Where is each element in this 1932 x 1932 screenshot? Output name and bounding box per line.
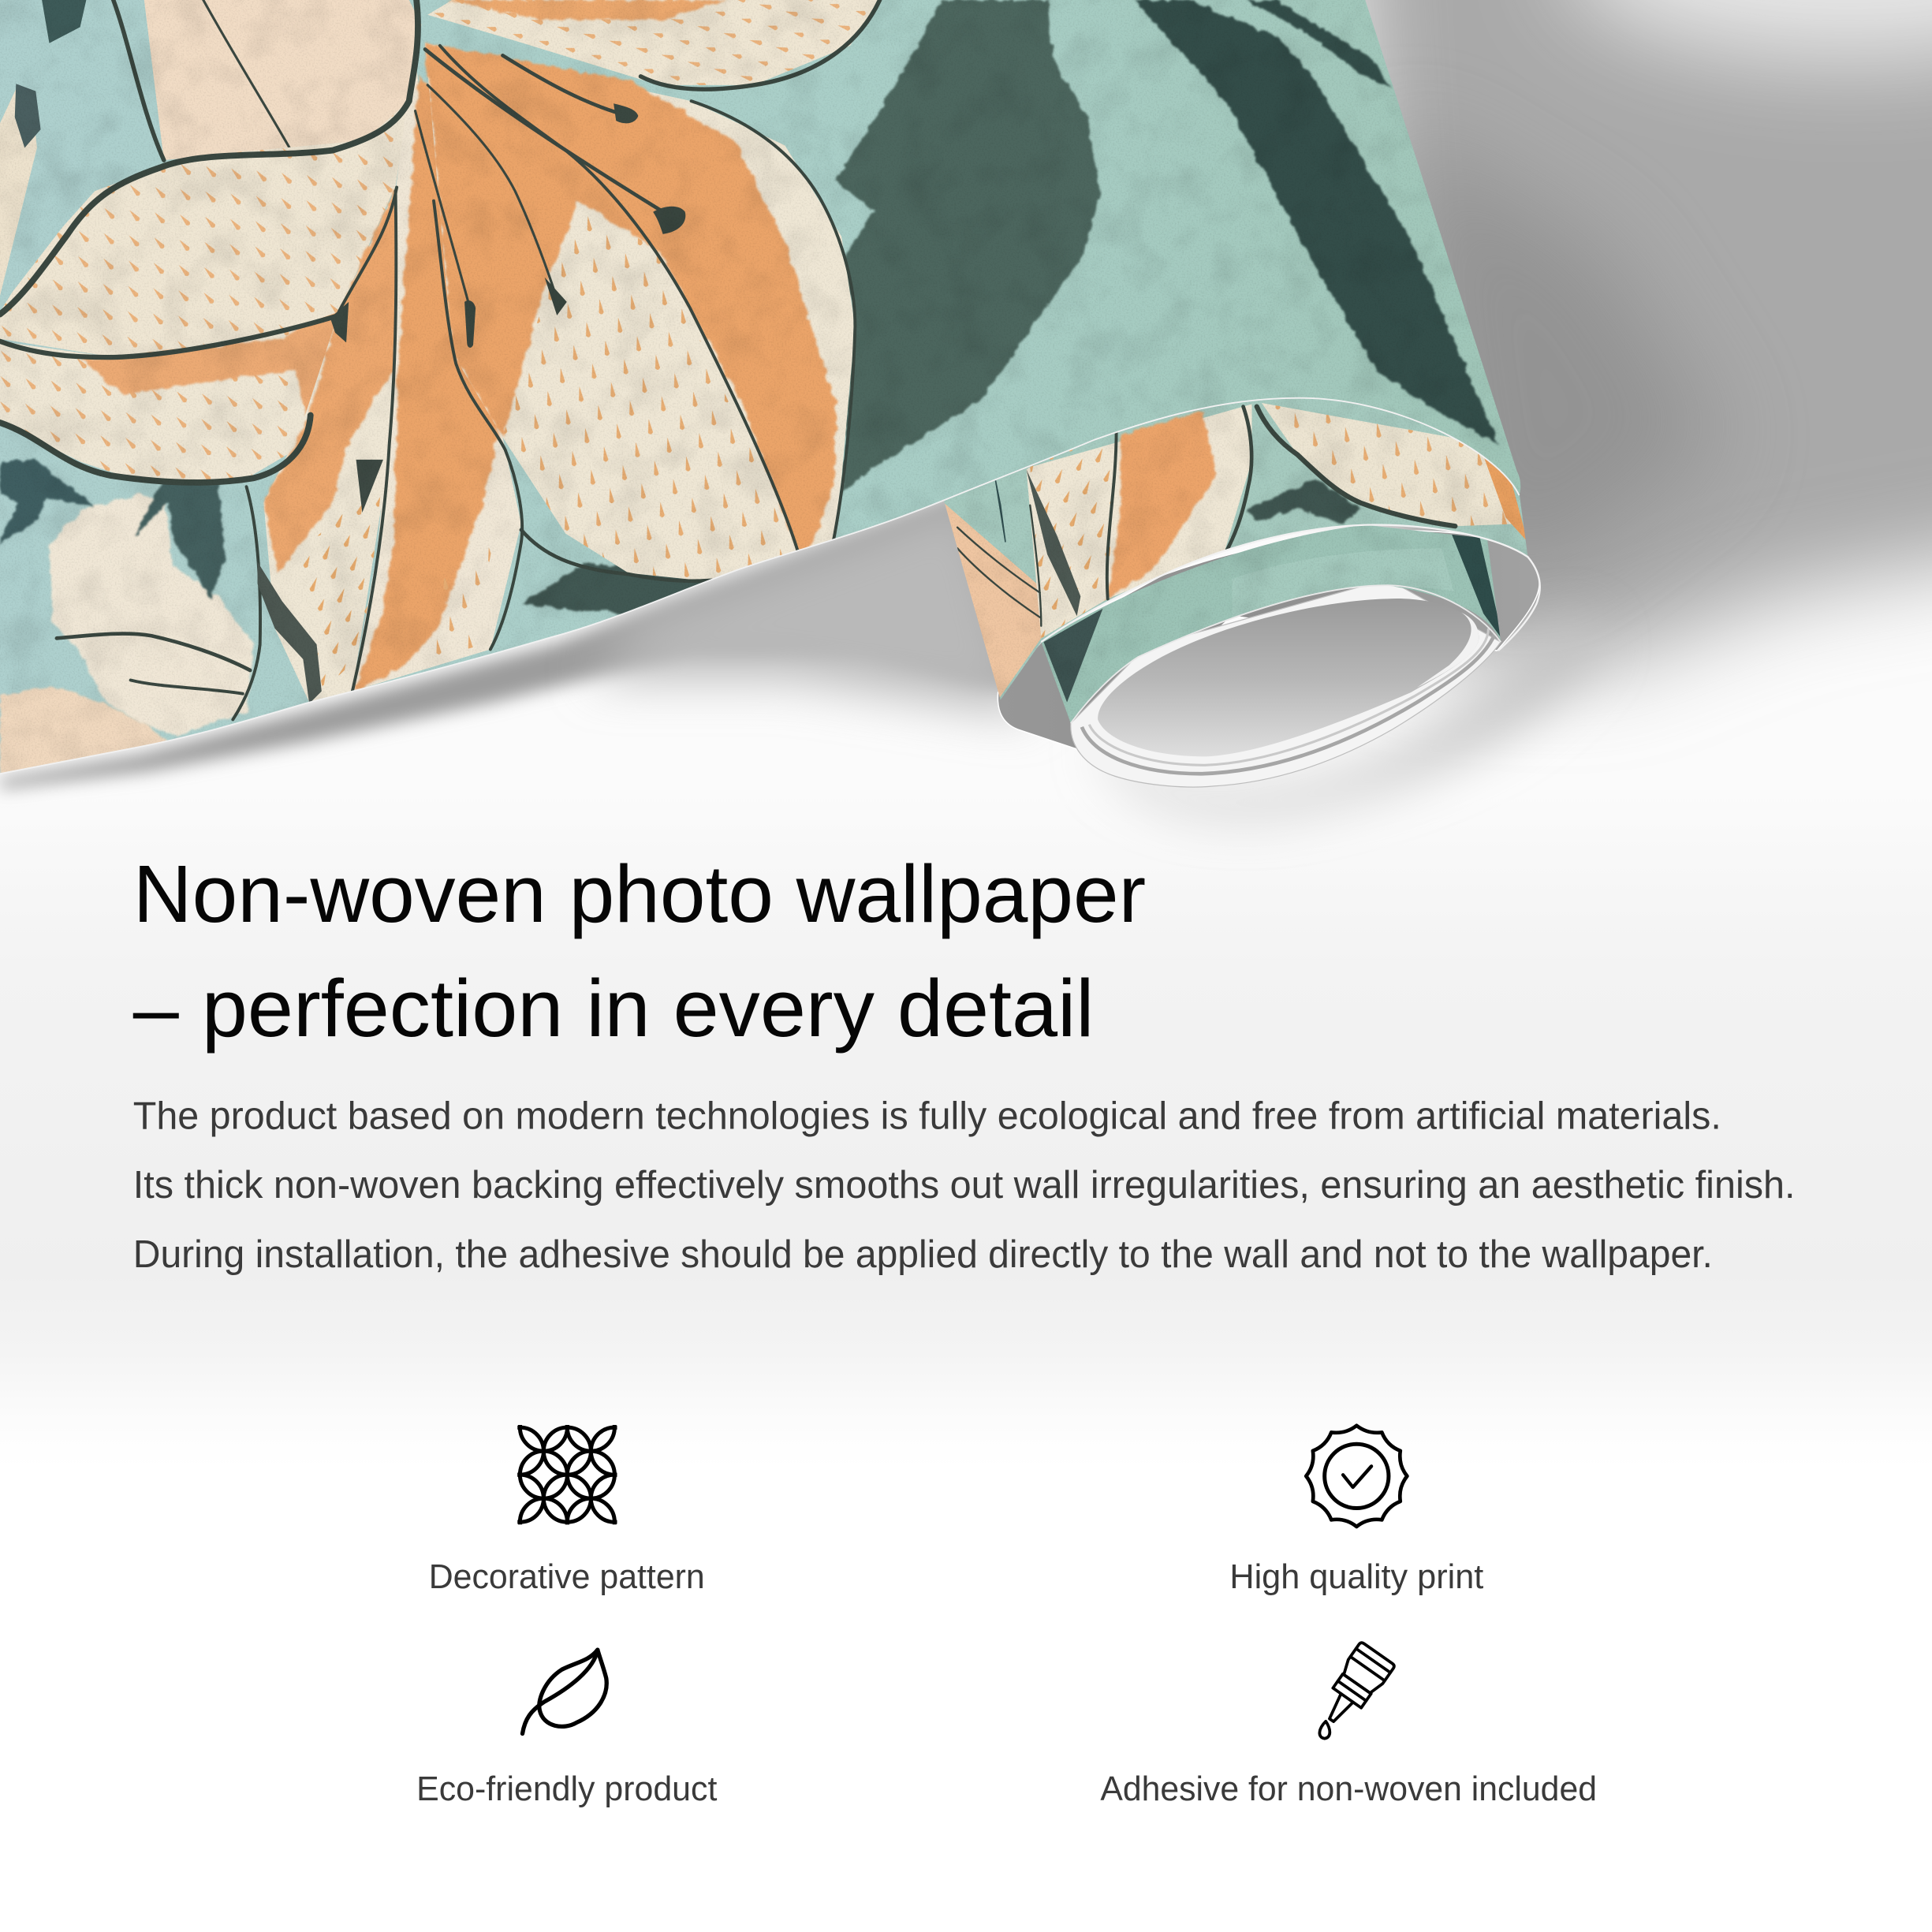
label: decorative pattern: Decorative pattern xyxy=(429,1557,705,1596)
stamens xyxy=(416,49,685,348)
description text: During installation, the adhesive should be applied directly to the wall and not to the wallpaper. xyxy=(133,1233,1713,1276)
petal outlines xyxy=(0,0,855,719)
lower-left orange petal xyxy=(0,311,339,483)
roll lower teal layer xyxy=(1041,525,1501,722)
peach bottom corner xyxy=(0,686,169,789)
icon: leaf xyxy=(522,1650,606,1733)
icon: quality badge xyxy=(1306,1426,1407,1527)
sheet front edge xyxy=(0,398,1520,774)
roll middle band with flower print xyxy=(937,394,1540,714)
label: adhesive included: Adhesive for non-woven included xyxy=(1100,1770,1597,1808)
upper-left cream petal xyxy=(0,101,409,357)
lower-left white petal xyxy=(49,494,254,736)
wallpaper roll xyxy=(937,394,1540,787)
wallpaper sheet with lily print xyxy=(0,0,1528,789)
roll end rings xyxy=(1071,579,1501,787)
dark diagonal stripes xyxy=(1134,0,1498,443)
icon: adhesive bottle xyxy=(1315,1642,1395,1739)
label: eco-friendly product: Eco-friendly product xyxy=(416,1770,717,1808)
dark lower leaves xyxy=(0,460,729,614)
centre orange petal xyxy=(352,49,521,692)
title second line: – perfection in every detail xyxy=(133,963,1095,1054)
label: high quality print: High quality print xyxy=(1229,1557,1483,1596)
description text xyxy=(133,1094,1796,1276)
top-right petal xyxy=(427,0,880,85)
description text: The product based on modern technologies is fully ecological and free from artificial materials. xyxy=(133,1094,1721,1137)
centre-left petal xyxy=(263,176,401,703)
wall shadows xyxy=(0,0,1932,813)
teal ground xyxy=(0,0,1528,789)
title: Non-woven photo wallpaper xyxy=(133,849,1146,939)
right petal xyxy=(425,43,855,583)
dotted inner petal xyxy=(503,201,798,583)
dark leaf xyxy=(835,0,1100,495)
description text: Its thick non-woven backing effectively smooths out wall irregularities, ensuring an aesthetic finish. xyxy=(133,1163,1796,1207)
icon: decorative pattern xyxy=(496,1404,638,1546)
far-left white petal and dark shapes xyxy=(0,0,164,296)
roll inner surface xyxy=(998,531,1539,752)
top-left peach petal xyxy=(144,0,421,160)
